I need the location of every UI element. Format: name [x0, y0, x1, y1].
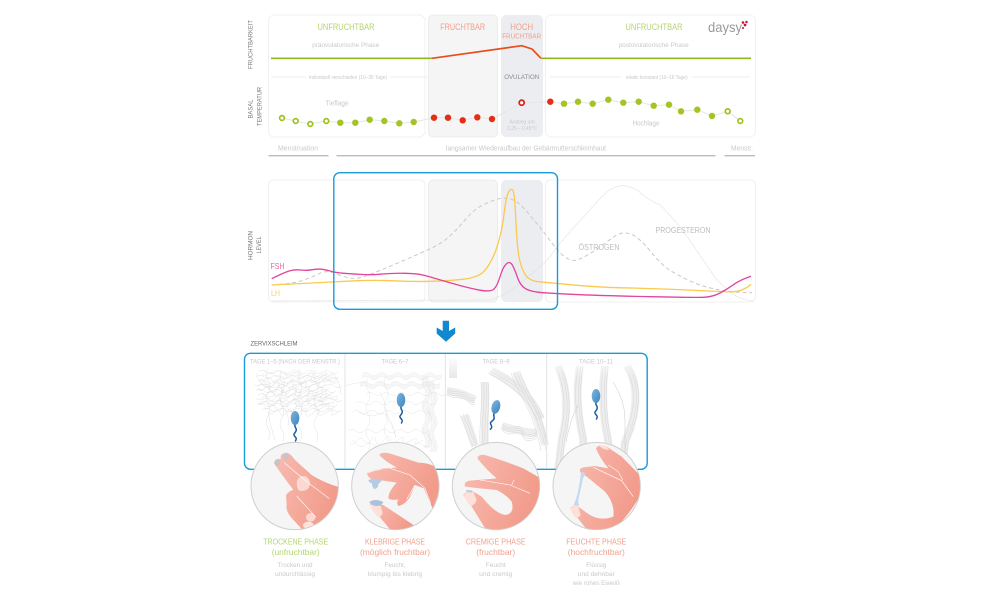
description	[275, 562, 315, 578]
curve: FSH	[272, 263, 751, 297]
circle illustration: creamy fingers	[452, 442, 541, 531]
circle illustration: sticky fingers	[352, 442, 440, 530]
column labels: TAGE 1–5 (NACH DER MENSTR.)	[250, 358, 340, 366]
label: Östrogen: ÖSTROGEN	[578, 243, 620, 252]
description: wie rohes Eiweiß	[572, 580, 620, 587]
panel: unfruchtbar preovulatory: individuell verschieden (10–35 Tage)	[309, 75, 387, 81]
circle illustration: dry fingers	[251, 442, 340, 531]
panel: unfruchtbar postovulatory	[546, 15, 756, 137]
label: FSH: FSH	[270, 261, 284, 271]
curve: Östrogen	[272, 198, 752, 293]
panel: unfruchtbar postovulatory: postovulatorische Phase	[619, 42, 689, 49]
panel: ovulation: OVULATION	[504, 74, 539, 81]
heading: Zervixschleim: ZERVIXSCHLEIM	[250, 340, 298, 348]
axis label: Hormon Level: HORMON	[248, 231, 254, 260]
description: und dehnbar	[578, 571, 616, 578]
description: Trocken und	[278, 562, 313, 569]
chart background panels	[268, 180, 756, 302]
panel: fruchtbar: FRUCHTBAR	[440, 22, 486, 32]
subheading: unfruchtbar: (unfruchtbar)	[272, 547, 320, 557]
cycle phases strip: Menstruation	[278, 146, 318, 152]
phase 3: creamy	[452, 442, 541, 578]
column labels: TAGE 6–7	[382, 358, 409, 366]
axis label: Basal Temperatur: TEMPERATUR	[256, 87, 264, 126]
column labels: TAGE 10–11	[579, 358, 613, 366]
panel: unfruchtbar postovulatory: Hochlage	[632, 120, 660, 128]
phase 1: dry	[251, 442, 340, 578]
column: Tage 10-11 mucus	[556, 366, 639, 470]
axis label: Basal Temperatur	[248, 87, 264, 126]
heading: Klebrige Phase: KLEBRIGE PHASE	[365, 536, 425, 546]
description: Feucht	[486, 562, 506, 569]
fertility line	[271, 46, 751, 58]
cycle phases strip: langsamer Wiederaufbau der Gebärmutterschleimhaut	[446, 146, 606, 152]
panel: unfruchtbar preovulatory: Tieflage	[326, 100, 349, 108]
phase 4: wet	[553, 442, 641, 587]
panel: ovulation: HOCH	[510, 22, 533, 32]
description: und cremig	[479, 571, 513, 578]
column labels	[250, 358, 613, 366]
sperm icons	[291, 389, 600, 441]
description: Feucht,	[384, 562, 406, 569]
arrow: down	[437, 321, 455, 342]
panel: unfruchtbar preovulatory	[268, 15, 492, 137]
panel: ovulation: FRUCHTBAR	[502, 33, 541, 40]
panel: unfruchtbar preovulatory: UNFRUCHTBAR	[318, 22, 375, 32]
panel: unfruchtbar postovulatory: relativ konstant (10–16 Tage)	[626, 75, 688, 81]
blue frame	[244, 353, 647, 469]
frame dividers	[345, 354, 547, 468]
phase 2: sticky	[352, 442, 440, 578]
description	[572, 562, 620, 587]
axis label: Basal Temperatur: BASAL	[248, 99, 254, 118]
panel: ovulation: Anstieg um	[510, 120, 534, 126]
axis label: Fruchtbarkeit: FRUCHTBARKEIT	[248, 20, 254, 69]
panel: ovulation	[501, 15, 543, 137]
description: klumpig bis klebrig	[368, 571, 422, 578]
label: LH: LH	[271, 288, 280, 298]
axis label: Hormon Level	[248, 231, 263, 260]
fade over mucus tops	[246, 354, 646, 378]
column labels: TAGE 8–9	[482, 358, 510, 366]
hormone chart	[248, 173, 756, 309]
highlight frame	[334, 173, 558, 309]
subheading: hochfruchtbar: (hochfruchtbar)	[568, 547, 625, 557]
label: Progesteron: PROGESTERON	[656, 226, 711, 235]
curve: LH	[272, 189, 751, 292]
subheading: möglich fruchtbar: (möglich fruchtbar)	[360, 547, 430, 557]
column: Tage 8-9 mucus	[447, 358, 547, 451]
panel: fruchtbar	[428, 15, 498, 137]
curve: Progesteron	[272, 186, 753, 301]
column: Tage 6-7 mucus	[345, 372, 446, 452]
heading: Feuchte Phase: FEUCHTE PHASE	[566, 536, 627, 546]
description: undurchlässig	[275, 571, 315, 578]
panel: unfruchtbar preovulatory: präovulatorische Phase	[312, 42, 380, 49]
heading: Trockene Phase: TROCKENE PHASE	[263, 536, 328, 546]
description	[479, 562, 513, 578]
panel: unfruchtbar postovulatory: UNFRUCHTBAR	[626, 22, 683, 32]
subheading: fruchtbar: (fruchtbar)	[476, 547, 515, 557]
heading: Cremige Phase: CREMIGE PHASE	[466, 536, 526, 546]
panel: ovulation: 0,25 – 0,45°C	[507, 126, 537, 132]
top section: fertility and basal temperature	[248, 15, 756, 156]
panel: cervical mucus frame	[244, 353, 647, 470]
axis label: Hormon Level: LEVEL	[257, 236, 263, 254]
description	[368, 562, 422, 578]
logo: daysy: daysy	[708, 19, 742, 35]
cycle phases strip: Menstr.	[731, 146, 753, 152]
description: Flüssig	[586, 562, 607, 569]
basal temperature curve	[280, 96, 743, 127]
circle illustration: wet fingers	[553, 442, 641, 531]
cycle phases strip	[268, 146, 755, 156]
column: Tage 1-5 mucus	[255, 368, 342, 442]
